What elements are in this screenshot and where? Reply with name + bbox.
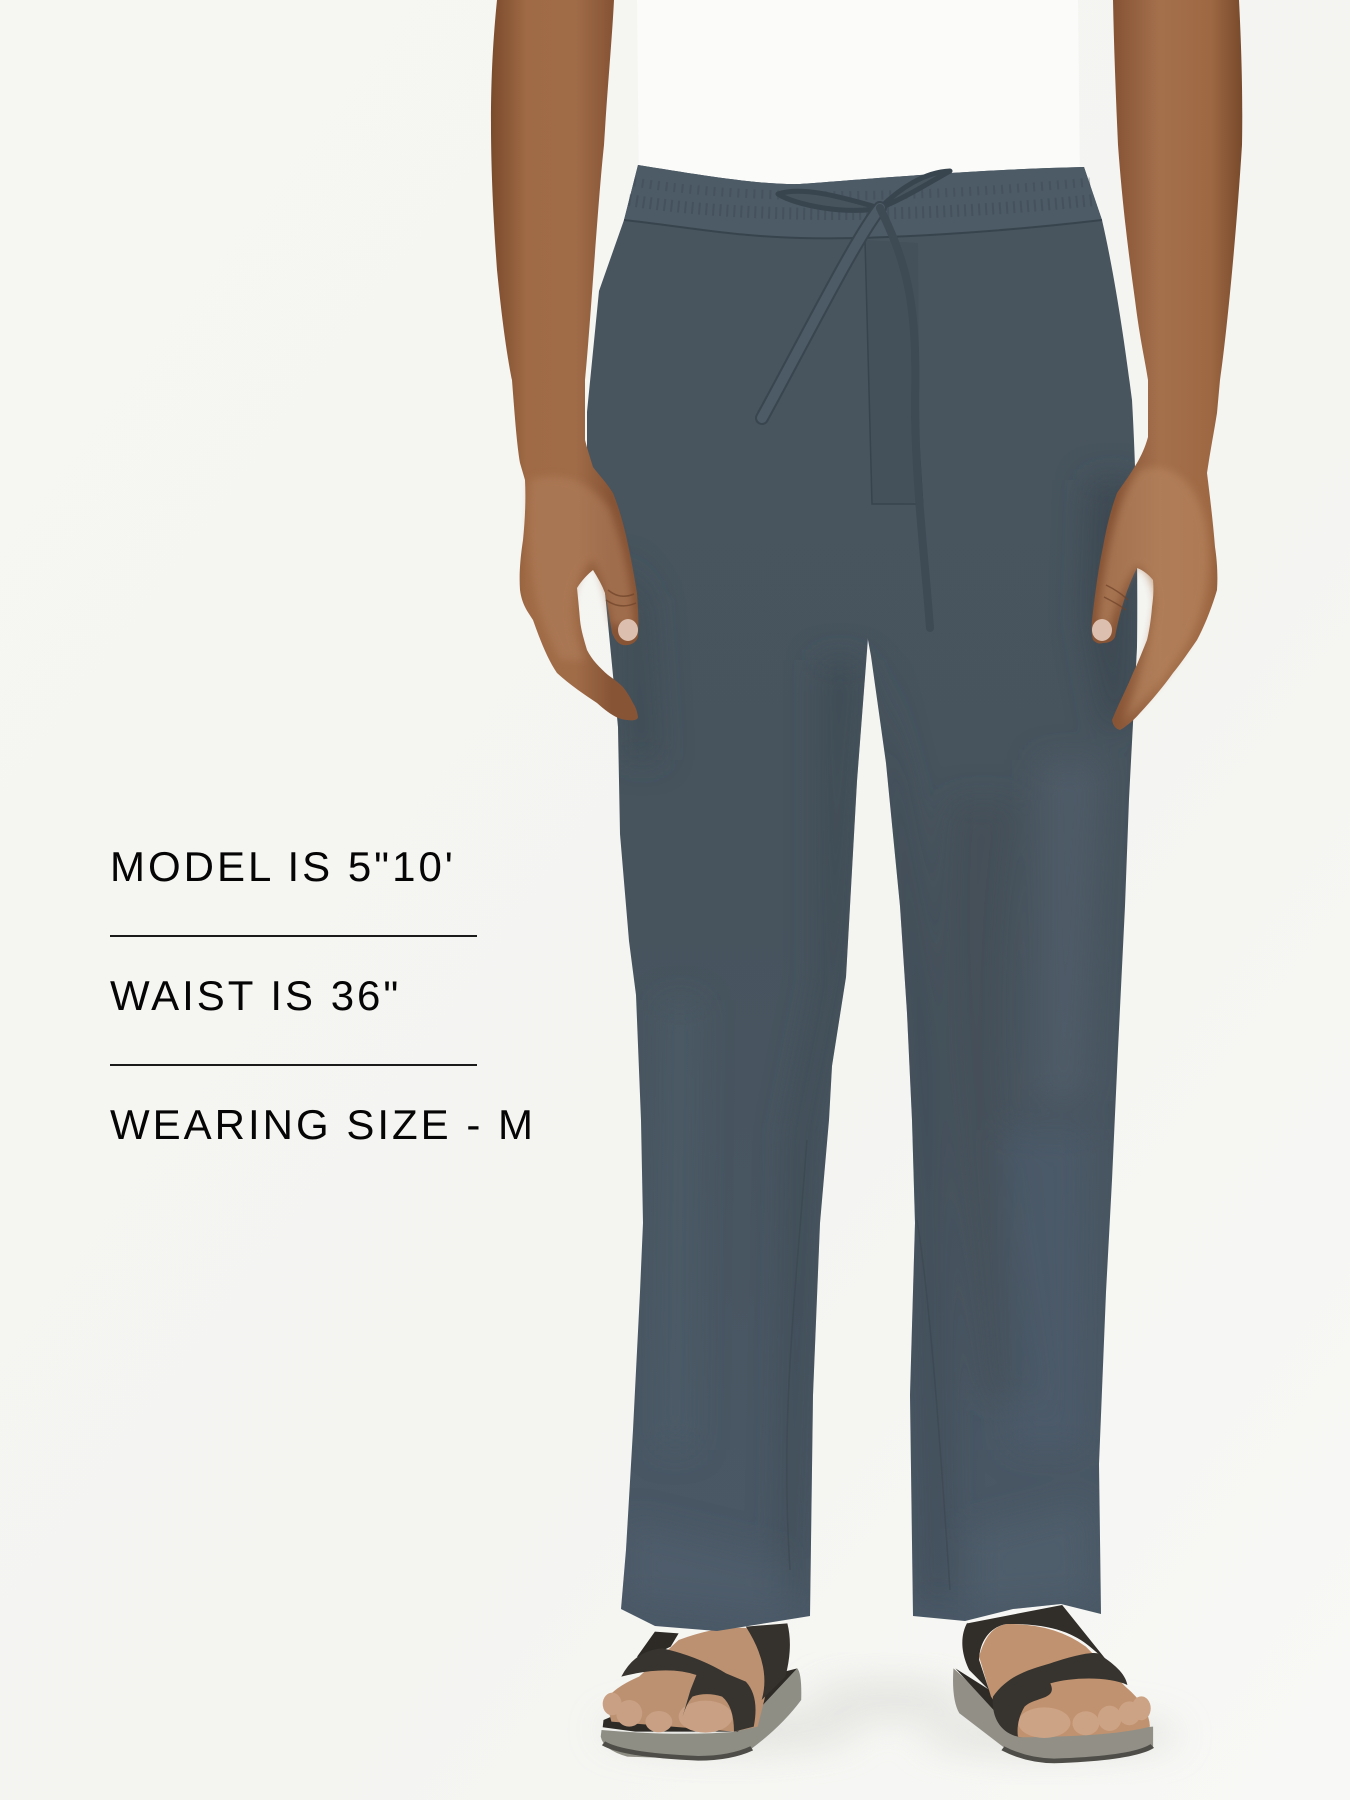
waistband bbox=[624, 165, 1102, 238]
waist measurement: WAIST IS 36" bbox=[110, 972, 401, 1019]
drawstring bow bbox=[762, 171, 950, 628]
right arm and hand bbox=[1092, 0, 1242, 730]
divider bbox=[110, 1064, 477, 1066]
left arm and hand bbox=[491, 0, 638, 720]
floor shadow bbox=[600, 1682, 1180, 1755]
divider bbox=[110, 935, 477, 937]
fabric shading bbox=[620, 480, 1135, 1620]
size details text block bbox=[110, 843, 536, 1148]
fly placket bbox=[865, 240, 922, 505]
size worn: WEARING SIZE - M bbox=[110, 1101, 536, 1148]
trouser body bbox=[587, 165, 1137, 1631]
right sandal and foot bbox=[953, 1605, 1153, 1762]
left sandal and foot bbox=[601, 1623, 801, 1759]
t-shirt bbox=[637, 0, 1080, 190]
fold lines bbox=[786, 1220, 950, 1590]
photo: model wearing grey drawstring trousers bbox=[490, 0, 1242, 1764]
trousers bbox=[587, 165, 1137, 1631]
model height: MODEL IS 5"10' bbox=[110, 843, 456, 890]
